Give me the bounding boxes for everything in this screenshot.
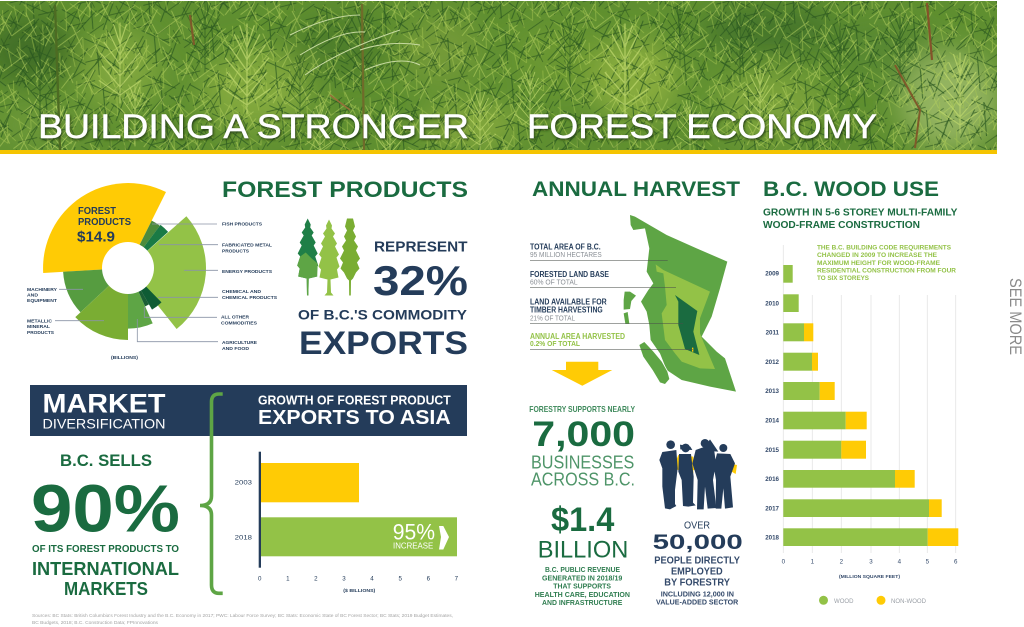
- pie labels: MACHINERY: [27, 287, 57, 292]
- stat: public revenue: $1.4: [551, 501, 614, 539]
- map legend text: ANNUAL AREA HARVESTED: [530, 332, 625, 341]
- heading: exports to asia: EXPORTS TO ASIA: [258, 407, 451, 429]
- map legend text: FORESTED LAND BASE: [530, 270, 610, 279]
- pie labels: [27, 222, 277, 360]
- stat: businesses: ACROSS B.C.: [531, 470, 635, 490]
- stat: businesses: [529, 405, 635, 490]
- header underline: [0, 150, 997, 154]
- heading: forest products: FOREST PRODUCTS: [222, 177, 468, 202]
- panel: market diversification: [30, 385, 467, 626]
- pie labels: ALL OTHER: [221, 315, 250, 320]
- bar chart: exports to asia: ($ BILLIONS): [343, 588, 376, 593]
- pie labels: EQUIPMENT: [27, 298, 57, 303]
- stat: employment: 50,000: [653, 531, 743, 554]
- map leader lines: [530, 261, 693, 350]
- legend: WOOD: [834, 599, 854, 605]
- annotation: building code: CHANGED IN 2009 TO INCREASE THE: [817, 252, 937, 259]
- stacked bar chart: wood use: 2015: [765, 447, 780, 454]
- stacked bar chart: wood use: 2013: [765, 388, 780, 395]
- stat: employment: [653, 519, 743, 607]
- sources: Sources: BC Stats: British Columbia's Forest Industry and the B.C. Economy in 2017; PWC: Labour Force Survey; BC Stats: Economic State of BC Forest Sector; BC Stats; 2019 Budget Estimates,: [32, 613, 453, 619]
- sources: [32, 613, 453, 626]
- header photo: pine needles: [0, 1, 1000, 166]
- stacked bar chart: wood use: 0: [782, 558, 786, 565]
- legend: [819, 596, 927, 605]
- pie labels: MINERAL: [27, 324, 50, 329]
- curly brace: [200, 394, 223, 593]
- stat: businesses: BUSINESSES: [531, 452, 634, 472]
- pie labels: METALLIC: [27, 318, 53, 323]
- stat: 90 percent: INTERNATIONAL: [32, 559, 179, 579]
- stat: businesses: FORESTRY SUPPORTS NEARLY: [529, 405, 635, 414]
- stacked bar chart: wood use: (MILLION SQUARE FEET): [839, 574, 901, 579]
- stacked bar chart: wood use: 4: [898, 558, 902, 565]
- stat: public revenue: B.C. PUBLIC REVENUE: [545, 565, 620, 574]
- panel: annual harvest: [529, 178, 743, 607]
- heading: b.c. wood use: B.C. WOOD USE: [763, 178, 939, 201]
- panel: b.c. wood use: [763, 178, 958, 605]
- stat: public revenue: GENERATED IN 2018/19: [542, 573, 622, 582]
- icon: three trees: [297, 218, 360, 296]
- pie labels: AND: [27, 292, 39, 297]
- pie callout: forest products value: [77, 206, 131, 246]
- heading: exports to asia: GROWTH OF FOREST PRODUCT: [258, 394, 451, 408]
- bar chart: exports to asia: [235, 452, 459, 593]
- annotation: building code: [817, 244, 957, 282]
- callout: 95 percent increase: 95%: [393, 519, 435, 544]
- stat: 90 percent: MARKETS: [64, 579, 148, 599]
- radial pie chart: [43, 183, 206, 340]
- stat: employment: BY FORESTRY: [664, 576, 730, 588]
- subheading: WOOD-FRAME CONSTRUCTION: [763, 220, 920, 231]
- map legend text: 0.2% OF TOTAL: [530, 341, 581, 348]
- annotation: building code: RESIDENTIAL CONSTRUCTION FROM FOUR: [817, 268, 957, 274]
- pie callout: forest products value: FOREST: [78, 206, 116, 217]
- bar chart: exports to asia: 2: [314, 576, 318, 583]
- map legend text: TOTAL AREA OF B.C.: [530, 242, 601, 251]
- pie labels: ENERGY PRODUCTS: [222, 269, 272, 274]
- stacked bar chart: wood use: 2011: [766, 330, 780, 336]
- pie labels: PRODUCTS: [27, 330, 54, 335]
- bar chart: exports to asia: 5: [398, 576, 402, 583]
- stat: public revenue: AND INFRASTRUCTURE: [542, 598, 622, 607]
- heading: exports to asia: [258, 394, 451, 429]
- annotation: building code: MAXIMUM HEIGHT FOR WOOD-FRAME: [817, 260, 940, 267]
- stacked bar chart: wood use: 2016: [765, 476, 780, 483]
- bar chart: exports to asia: 2018: [235, 534, 253, 541]
- banner heading: market diversification: [42, 388, 166, 431]
- stat: 32 percent of commodity exports: EXPORTS: [299, 325, 468, 361]
- stat: employment: VALUE-ADDED SECTOR: [656, 598, 739, 607]
- stat: 32 percent of commodity exports: 32%: [373, 257, 468, 304]
- pie labels: COMMODITIES: [221, 320, 257, 325]
- map legend text: 60% OF TOTAL: [530, 280, 578, 287]
- banner: [30, 385, 467, 436]
- arrow: down: [552, 362, 612, 386]
- bar chart: exports to asia: 2003: [235, 480, 253, 487]
- stat: 90 percent: [31, 451, 180, 599]
- stacked bar chart: wood use: 6: [954, 558, 958, 565]
- stacked bar chart: wood use: 2018: [765, 534, 780, 542]
- banner heading: market diversification: DIVERSIFICATION: [42, 415, 166, 431]
- pie leader lines: [55, 224, 218, 342]
- stacked bar chart: wood use: 2010: [765, 300, 780, 307]
- callout: 95 percent increase: [393, 519, 449, 551]
- stat: public revenue: [535, 501, 630, 607]
- callout: 95 percent increase: INCREASE: [393, 542, 433, 551]
- bar chart: exports to asia: 3: [342, 576, 346, 583]
- pie labels: CHEMICAL AND: [222, 289, 262, 294]
- annotation: building code: TO SIX STOREYS: [817, 275, 869, 282]
- pie labels: PRODUCTS: [222, 248, 249, 254]
- pie callout: forest products value: PRODUCTS: [78, 217, 131, 228]
- stacked bar chart: wood use: 2017: [765, 506, 780, 512]
- stat: employment: PEOPLE DIRECTLY: [654, 554, 740, 566]
- stat: employment: INCLUDING 12,000 IN: [661, 590, 734, 599]
- title: BUILDING A STRONGER: [38, 108, 469, 146]
- map legend text: 95 MILLION HECTARES: [530, 252, 602, 259]
- stacked bar chart: wood use: 2009: [765, 271, 780, 278]
- stacked bar chart: wood use: 2: [840, 558, 844, 565]
- legend: NON-WOOD: [891, 599, 927, 605]
- heading: annual harvest: ANNUAL HARVEST: [532, 178, 740, 201]
- pie labels: FISH PRODUCTS: [222, 222, 262, 226]
- map legend text: [530, 242, 625, 348]
- icon: forestry workers: [659, 439, 737, 509]
- stat: public revenue: THAT SUPPORTS: [553, 582, 611, 591]
- pie callout: forest products value: $14.9: [77, 230, 115, 246]
- stacked bar chart: wood use: [765, 245, 958, 579]
- bar chart: exports to asia: 4: [370, 576, 374, 583]
- pie labels: FABRICATED METAL: [222, 242, 272, 248]
- stacked bar chart: wood use: 2012: [765, 359, 780, 366]
- stacked bar chart: wood use: 2014: [765, 418, 780, 424]
- title: FOREST ECONOMY: [527, 108, 877, 146]
- subheading: [763, 208, 958, 231]
- stat: 32 percent of commodity exports: OF B.C.'S COMMODITY: [298, 307, 467, 322]
- stat: employment: OVER: [684, 519, 710, 531]
- sources: BC Budgets, 2018; B.C. Construction Data; FPInnovations: [32, 620, 159, 626]
- pie labels: AGRICULTURE: [222, 340, 257, 345]
- stacked bar chart: wood use: 3: [869, 558, 873, 565]
- map legend text: LAND AVAILABLE FOR: [530, 298, 607, 307]
- annotation: building code: THE B.C. BUILDING CODE REQUIREMENTS: [817, 244, 951, 252]
- stat: 32 percent of commodity exports: REPRESENT: [374, 239, 468, 256]
- pie labels: (BILLIONS): [111, 355, 139, 360]
- title: [38, 108, 877, 146]
- subheading: GROWTH IN 5-6 STOREY MULTI-FAMILY: [763, 208, 958, 219]
- banner heading: market diversification: MARKET: [42, 388, 166, 418]
- stat: 32 percent of commodity exports: [298, 239, 468, 361]
- bar chart: exports to asia: 7: [455, 576, 459, 583]
- map of british columbia: [624, 215, 736, 392]
- bar chart: exports to asia: 0: [258, 576, 262, 583]
- pie labels: CHEMICAL PRODUCTS: [222, 295, 277, 300]
- stacked bar chart: wood use: 1: [811, 558, 815, 565]
- map legend text: TIMBER HARVESTING: [530, 306, 603, 315]
- stat: 90 percent: B.C. SELLS: [60, 451, 152, 470]
- panel: forest products: [27, 177, 468, 361]
- stat: employment: EMPLOYED: [671, 565, 723, 577]
- stat: public revenue: BILLION: [538, 537, 628, 564]
- stat: public revenue: HEALTH CARE, EDUCATION: [535, 590, 630, 599]
- stat: businesses: 7,000: [532, 415, 635, 454]
- bar chart: exports to asia: 1: [286, 576, 290, 583]
- stat: 90 percent: 90%: [31, 472, 180, 547]
- map legend text: 21% OF TOTAL: [530, 315, 575, 322]
- stat: 90 percent: OF ITS FOREST PRODUCTS TO: [32, 543, 179, 555]
- pie labels: AND FOOD: [222, 346, 250, 351]
- stacked bar chart: wood use: 5: [926, 558, 930, 565]
- bar chart: exports to asia: 6: [427, 576, 431, 583]
